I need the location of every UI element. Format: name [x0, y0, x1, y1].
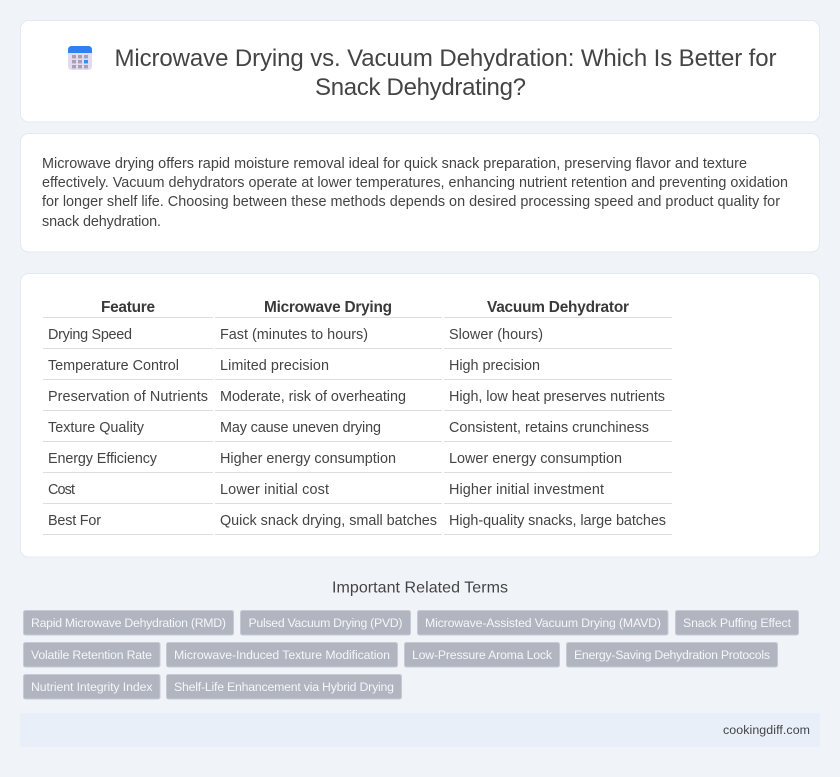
panel: intro text [20, 134, 820, 252]
tags: related terms: Microwave-Induced Texture Modification [174, 648, 390, 662]
paragraph: Microwave drying offers rapid moisture removal ideal for quick snack preparation, preserving flavor and texture [42, 156, 747, 172]
icon: calendar [68, 46, 92, 70]
title: Microwave Drying vs. Vacuum Dehydration: Which Is Better for [114, 45, 776, 72]
row: preservation of nutrients: Moderate, risk of overheating [220, 389, 406, 405]
tags: related terms: Microwave-Assisted Vacuum Drying (MAVD) [425, 616, 661, 630]
row: preservation of nutrients: High, low heat preserves nutrients [449, 389, 665, 405]
row: best for: Quick snack drying, small batches [220, 513, 437, 529]
tags: related terms: Pulsed Vacuum Drying (PVD) [248, 616, 402, 630]
tags: related terms: Snack Puffing Effect [683, 616, 792, 630]
row: temperature control: Temperature Control [48, 358, 179, 374]
tags: related terms [24, 610, 798, 699]
row: preservation of nutrients: Preservation of Nutrients [48, 389, 208, 405]
panel: header [20, 20, 820, 122]
tags: related terms: Low-Pressure Aroma Lock [412, 648, 553, 662]
table header: Feature [101, 299, 155, 316]
row: drying speed: Fast (minutes to hours) [220, 327, 368, 343]
row: cost [48, 482, 604, 498]
table header: Vacuum Dehydrator [487, 299, 629, 316]
row: cost: Cost [48, 482, 75, 498]
panel: comparison table [20, 274, 820, 557]
row: energy efficiency: Lower energy consumption [449, 451, 622, 467]
tags: related terms: Shelf-Life Enhancement via Hybrid Drying [174, 680, 394, 694]
tags: related terms: Energy-Saving Dehydration Protocols [574, 648, 770, 662]
row: texture quality [48, 420, 649, 436]
tags: related terms: Nutrient Integrity Index [31, 680, 153, 694]
paragraph: for longer shelf life. Choosing between these methods depends on desired processing speed and product quality for [42, 194, 780, 210]
tags: related terms: Rapid Microwave Dehydration (RMD) [31, 616, 226, 630]
row: drying speed: Drying Speed [48, 327, 132, 343]
paragraph: snack dehydration. [42, 214, 161, 230]
row: energy efficiency [48, 451, 622, 467]
footer: cookingdiff.com [723, 723, 810, 737]
row: energy efficiency: Energy Efficiency [48, 451, 158, 467]
row: texture quality: Consistent, retains crunchiness [449, 420, 649, 436]
row: temperature control: Limited precision [220, 358, 329, 374]
table grid [43, 318, 672, 534]
paragraph: effectively. Vacuum dehydrators operate at lower temperatures, enhancing nutrient retention and preventing oxidation [42, 175, 788, 191]
row: drying speed [48, 327, 543, 343]
row: energy efficiency: Higher energy consumption [220, 451, 396, 467]
heading: related terms: Important Related Terms [332, 580, 508, 596]
row: best for: High-quality snacks, large batches [449, 513, 666, 529]
row: texture quality: May cause uneven drying [220, 420, 381, 436]
footer [20, 713, 820, 747]
title line 2: Snack Dehydrating? [315, 74, 526, 101]
paragraph [42, 156, 788, 230]
row: preservation of nutrients [48, 389, 665, 405]
table header: Microwave Drying [264, 299, 392, 316]
row: texture quality: Texture Quality [48, 420, 145, 436]
row: best for [48, 513, 666, 529]
table header [101, 299, 629, 316]
row: drying speed: Slower (hours) [449, 327, 543, 343]
tags: related terms: Volatile Retention Rate [31, 648, 152, 662]
row: cost: Lower initial cost [220, 482, 329, 498]
row: best for: Best For [48, 513, 101, 529]
row: cost: Higher initial investment [449, 482, 604, 498]
row: temperature control [48, 358, 540, 374]
row: temperature control: High precision [449, 358, 540, 374]
